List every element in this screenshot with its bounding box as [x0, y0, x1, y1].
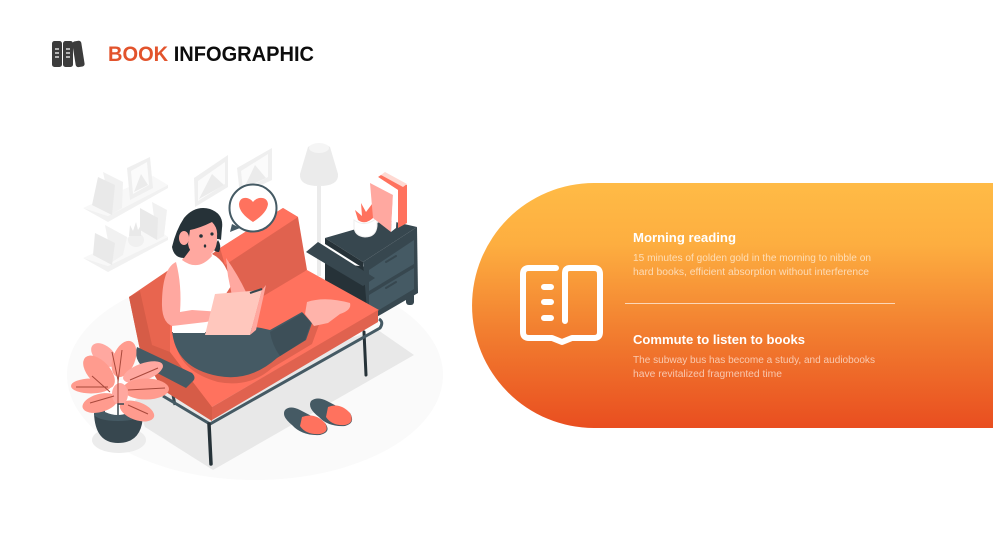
- sofa: [129, 208, 382, 464]
- panel: gradient banner: [472, 183, 993, 428]
- stacked books on nightstand: [370, 172, 407, 232]
- text block: commute to listen to books: Commute to listen to books: [633, 332, 805, 347]
- slippers: [284, 398, 352, 435]
- near arm: [162, 262, 224, 326]
- sofa floor shadow: [135, 330, 414, 470]
- back legs and frame: [364, 332, 366, 375]
- text block: commute to listen to books: The subway bus has become a study, and audiobooks: [633, 355, 875, 366]
- wall shelves with books: [83, 157, 168, 272]
- text block: morning reading: hard books, efficient absorption without interference: [633, 267, 869, 278]
- hair back: [172, 208, 222, 258]
- feet: [305, 299, 350, 326]
- legs: [172, 312, 312, 377]
- back rest: [190, 208, 307, 320]
- woman: [162, 208, 350, 383]
- far arm: [226, 258, 246, 296]
- illustration: woman reading on a sofa: [67, 143, 443, 480]
- title: BOOK INFOGRAPHIC: [108, 43, 314, 66]
- book: [205, 290, 262, 335]
- potted plant: [71, 337, 169, 453]
- left armrest: [136, 347, 194, 388]
- floor lamp: [300, 143, 338, 276]
- icon: open book: [523, 268, 600, 342]
- floor ellipse: [67, 270, 443, 480]
- face: [188, 222, 217, 257]
- torso: [172, 254, 231, 332]
- text block: morning reading: [633, 230, 871, 278]
- seat front: [212, 310, 378, 420]
- neck: [182, 250, 212, 265]
- text block: commute to listen to books: have revitalized fragmented time: [633, 369, 782, 380]
- left arm side: [129, 265, 212, 421]
- nightstand: [306, 220, 418, 322]
- wall picture frames: [194, 148, 272, 207]
- speech bubble with heart: [230, 184, 276, 232]
- text block: morning reading: 15 minutes of golden gold in the morning to nibble on: [633, 253, 871, 264]
- small plant on nightstand: [354, 203, 377, 237]
- text block: commute to listen to books: [633, 332, 875, 380]
- text block: morning reading: Morning reading: [633, 230, 736, 245]
- seat top: [170, 270, 379, 407]
- shadow on the seat: [176, 318, 320, 383]
- icon: books logo: [52, 40, 85, 67]
